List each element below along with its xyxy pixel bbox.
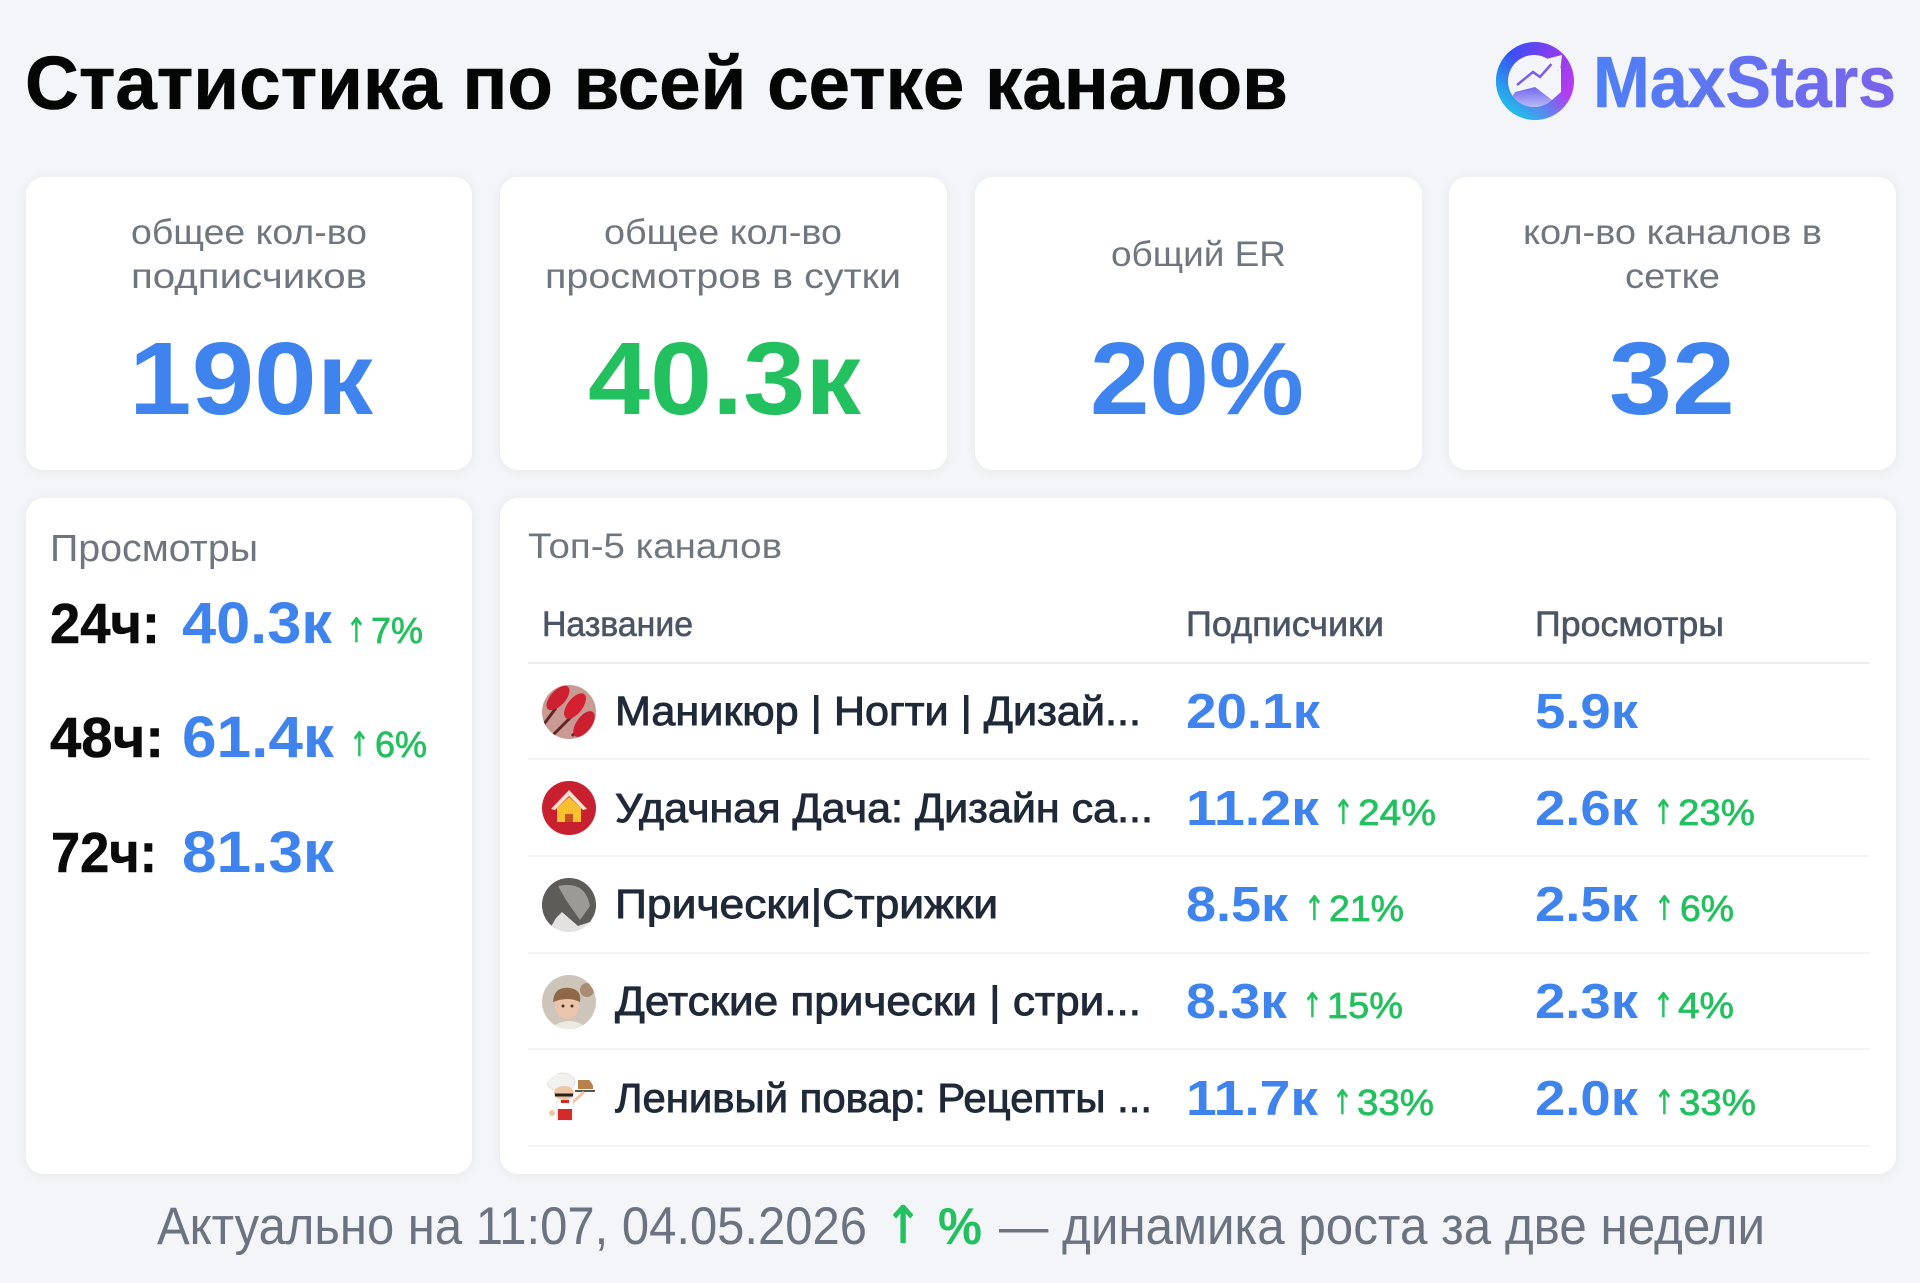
label — [545, 213, 901, 296]
footer note: Актуально на 11:07, 04.05.2026 — [157, 1197, 867, 1256]
table header: Просмотры — [1535, 605, 1724, 644]
logo: MaxStars — [1496, 42, 1896, 123]
row: 72h — [51, 820, 335, 885]
panel heading: Просмотры — [50, 528, 258, 570]
table header: Подписчики — [1186, 605, 1384, 644]
logo wordmark: MaxStars — [1593, 43, 1896, 123]
channel name: Прически|Стрижки — [615, 881, 998, 927]
footer note: % — [938, 1198, 982, 1256]
channel name: Удачная Дача: Дизайн са... — [615, 785, 1153, 831]
subscribers: 11.7к — [1186, 1072, 1319, 1126]
row: hairstyles channel — [542, 878, 1734, 932]
panel: top 5 channels — [500, 498, 1896, 1174]
value: 32 — [1609, 321, 1735, 436]
views: 2.6к — [1535, 782, 1639, 836]
channel name: Маникюр | Ногти | Дизай... — [615, 688, 1141, 734]
footer note: ↑ — [884, 1196, 922, 1256]
row: 48h — [50, 705, 427, 770]
subscribers: ↑ — [1333, 793, 1354, 833]
row: 24h: 7% — [371, 610, 423, 651]
subscribers: 20.1к — [1186, 685, 1321, 739]
subscribers: ↑ — [1332, 1083, 1353, 1123]
panel: subscribers total — [26, 177, 472, 470]
label: общий ER — [1111, 235, 1286, 274]
row: 48h: 6% — [375, 724, 427, 765]
subscribers — [1186, 878, 1404, 932]
title: Статистика по всей сетке каналов — [25, 41, 1288, 125]
avatar: chef — [546, 1072, 595, 1120]
label: просмотров в сутки — [545, 257, 901, 296]
views — [1535, 1072, 1756, 1126]
row: 24h — [50, 591, 423, 656]
subscribers: 33% — [1357, 1082, 1434, 1123]
subscribers: ↑ — [1304, 889, 1325, 929]
panel heading: Топ-5 каналов — [528, 527, 782, 566]
panel: views by period — [26, 498, 472, 1174]
subscribers: 15% — [1327, 985, 1403, 1026]
row: 48h: 48ч: — [50, 706, 164, 770]
views: 5.9к — [1535, 685, 1639, 739]
table header — [542, 605, 1724, 644]
views: 4% — [1678, 985, 1734, 1026]
views: ↑ — [1653, 793, 1674, 833]
subscribers: 11.2к — [1186, 782, 1320, 836]
row: dacha channel — [542, 781, 1755, 836]
views: ↑ — [1654, 1083, 1675, 1123]
subscribers — [1186, 975, 1403, 1029]
row: 72h: 81.3к — [182, 820, 335, 885]
views — [1535, 975, 1734, 1029]
row: 48h: 61.4к — [182, 705, 335, 770]
value: 190к — [129, 321, 373, 436]
channel name: Детские прически | стри... — [615, 978, 1141, 1024]
row: 72h: 72ч: — [51, 821, 157, 885]
views: 2.3к — [1535, 975, 1639, 1029]
label: сетке — [1625, 257, 1720, 296]
panel: overall ER — [975, 177, 1422, 470]
avatar: child — [542, 975, 596, 1030]
label: общее кол-во — [604, 213, 842, 252]
row: 48h: ↑ — [349, 725, 370, 765]
views: 2.0к — [1535, 1072, 1639, 1126]
label — [131, 213, 367, 296]
row: lazy cook channel — [546, 1072, 1755, 1121]
views — [1535, 878, 1734, 932]
views: 2.5к — [1535, 878, 1639, 932]
row: 24h: 40.3к — [182, 591, 333, 656]
value: 20% — [1090, 321, 1304, 436]
table header: Название — [542, 605, 693, 644]
avatar: house — [542, 781, 596, 835]
panel: channel count — [1449, 177, 1896, 470]
subscribers: 8.5к — [1186, 878, 1289, 932]
row: 24h: ↑ — [346, 611, 367, 651]
views: ↑ — [1654, 889, 1675, 929]
label: общее кол-во — [131, 213, 367, 252]
subscribers: 24% — [1358, 792, 1436, 833]
subscribers — [1186, 1072, 1434, 1126]
row: manicure channel — [542, 682, 1639, 741]
avatar: red nails — [542, 685, 596, 739]
value: 40.3к — [588, 321, 861, 436]
label: подписчиков — [131, 257, 367, 296]
views — [1535, 782, 1755, 836]
label: кол-во каналов в — [1523, 213, 1822, 252]
label — [1523, 213, 1822, 296]
views: 33% — [1679, 1082, 1756, 1123]
subscribers: ↑ — [1302, 986, 1323, 1026]
views: 23% — [1678, 792, 1755, 833]
views: ↑ — [1653, 986, 1674, 1026]
panel: daily views total — [500, 177, 947, 470]
icon: logo ring with growth arrow — [1496, 42, 1574, 120]
subscribers — [1186, 782, 1436, 836]
avatar: grey hair — [542, 878, 596, 932]
row: 24h: 24ч: — [50, 592, 160, 656]
row: kids hairstyles channel — [542, 975, 1734, 1030]
footer note — [157, 1196, 1765, 1256]
views: 6% — [1680, 888, 1734, 929]
subscribers: 21% — [1329, 888, 1404, 929]
subscribers: 8.3к — [1186, 975, 1288, 1029]
channel name: Ленивый повар: Рецепты ... — [615, 1075, 1152, 1121]
footer note: — динамика роста за две недели — [999, 1197, 1765, 1256]
